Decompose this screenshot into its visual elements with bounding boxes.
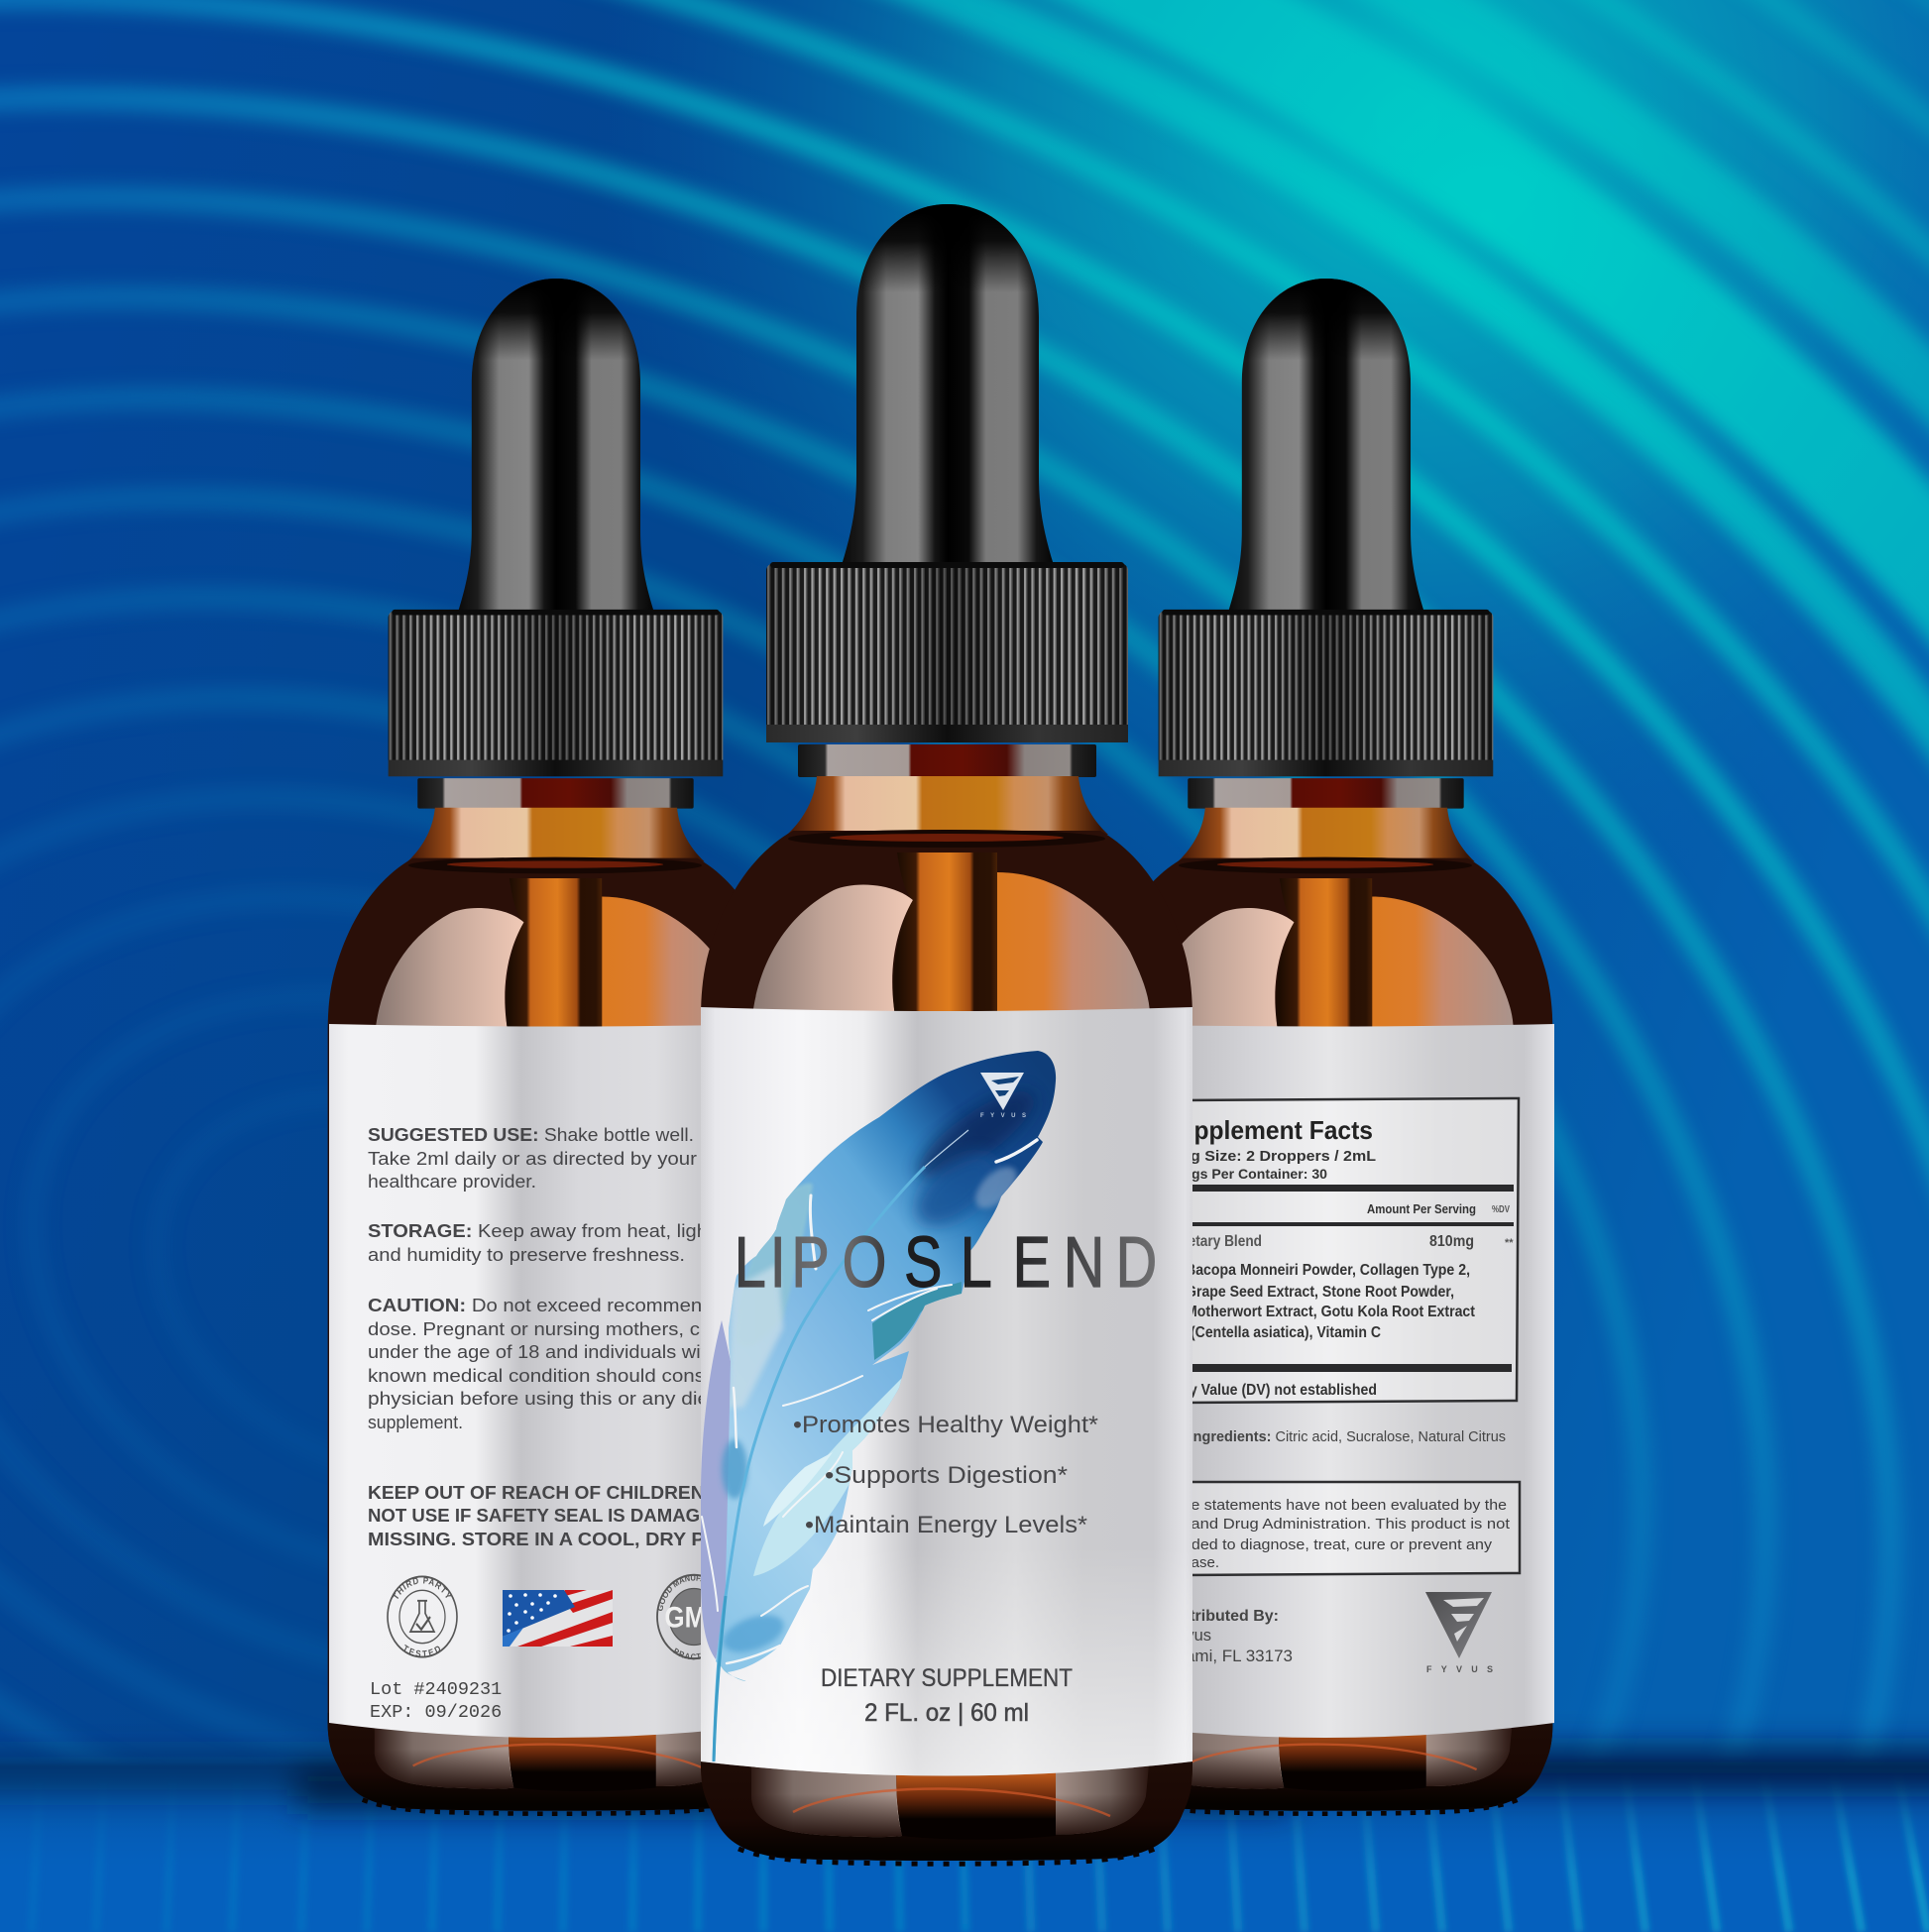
bottle body and dropper bbox=[701, 204, 1192, 1864]
benefit list bbox=[793, 1412, 1098, 1538]
feather brand logo bbox=[980, 1073, 1026, 1119]
teal upper barb bbox=[736, 1184, 813, 1346]
white slits bbox=[702, 1140, 1037, 1663]
label panel bbox=[1096, 1024, 1554, 1738]
supplement facts box: ** Daily Value (DV) not established bbox=[1149, 1382, 1377, 1399]
bottle body and dropper bbox=[328, 279, 782, 1814]
feather brand logo: FYVUS bbox=[980, 1113, 1026, 1119]
third party tested seal: TESTED bbox=[404, 1644, 440, 1656]
dark ink patch bbox=[909, 1088, 1037, 1186]
right bottle: supplement facts bbox=[1096, 279, 1554, 1814]
supplement facts box: ** bbox=[1505, 1237, 1514, 1249]
directions text: dose. Pregnant or nursing mothers, children bbox=[368, 1319, 760, 1339]
directions text: STORAGE: Keep away from heat, light, bbox=[368, 1221, 719, 1241]
directions text: KEEP OUT OF REACH OF CHILDREN. DO bbox=[368, 1483, 743, 1503]
directions text: known medical condition should consult a bbox=[368, 1366, 744, 1386]
supplement facts box: %DV bbox=[1492, 1204, 1510, 1215]
fda disclaimer box: disease. bbox=[1164, 1554, 1219, 1571]
lot number bbox=[370, 1679, 502, 1723]
floor shadow band bbox=[0, 1749, 1929, 1809]
lot number: EXP: 09/2026 bbox=[370, 1702, 502, 1723]
tail barbs bbox=[721, 1663, 745, 1681]
directions text: under the age of 18 and individuals with a bbox=[368, 1342, 735, 1362]
distributor details: Distributed By: bbox=[1165, 1608, 1279, 1625]
directions text: physician before using this or any dietary bbox=[368, 1389, 743, 1409]
pale lower vane bbox=[753, 1373, 907, 1576]
benefit list: •Supports Digestion* bbox=[825, 1462, 1068, 1489]
distributor details: Miami, FL 33173 bbox=[1168, 1647, 1293, 1665]
other ingredients: Other ingredients: Citric acid, Sucralose, Natural Citrus bbox=[1147, 1429, 1506, 1445]
supplement facts box: Bacopa Monneiri Powder, Collagen Type 2, bbox=[1186, 1262, 1470, 1279]
supplement facts box: Servings Per Container: 30 bbox=[1149, 1166, 1327, 1182]
feather spine bbox=[714, 1167, 925, 1762]
product type and size: 2 FL. oz | 60 ml bbox=[864, 1699, 1029, 1727]
fyvus logo: FYVUS bbox=[1426, 1664, 1493, 1674]
pale left vane bbox=[729, 1264, 783, 1408]
fda disclaimer box: Food and Drug Administration. This product is not bbox=[1149, 1516, 1511, 1533]
fda disclaimer box bbox=[1149, 1482, 1520, 1575]
product type and size: DIETARY SUPPLEMENT bbox=[821, 1664, 1073, 1692]
gmp seal: GOOD MANUFACTURING bbox=[656, 1573, 732, 1612]
fyvus logo bbox=[1425, 1592, 1493, 1674]
directions text: healthcare provider. bbox=[368, 1172, 536, 1192]
supplement facts box: (Centella asiatica), Vitamin C bbox=[1191, 1324, 1381, 1341]
directions text: Take 2ml daily or as directed by your bbox=[368, 1149, 697, 1169]
watercolor feather bbox=[694, 1041, 1071, 1762]
directions text: CAUTION: Do not exceed recommended bbox=[368, 1296, 736, 1315]
lot number: Lot #2409231 bbox=[370, 1679, 502, 1700]
fda disclaimer box: intended to diagnose, treat, cure or prevent any bbox=[1157, 1536, 1493, 1553]
supplement facts box: Grape Seed Extract, Stone Root Powder, bbox=[1186, 1284, 1454, 1301]
gmp seal: GMP bbox=[664, 1601, 724, 1634]
directions text: MISSING. STORE IN A COOL, DRY PLACE. bbox=[368, 1530, 763, 1549]
centre bottle: front label bbox=[694, 204, 1192, 1864]
gmp seal: PRACTICE bbox=[672, 1646, 717, 1661]
light lower patch bbox=[718, 1608, 789, 1659]
directions text: and humidity to preserve freshness. bbox=[368, 1245, 685, 1265]
label panel bbox=[329, 1024, 781, 1738]
fda disclaimer box: These statements have not been evaluated by the bbox=[1156, 1497, 1507, 1514]
usa flag bbox=[503, 1590, 613, 1647]
supplement facts box: Serving Size: 2 Droppers / 2mL bbox=[1142, 1148, 1376, 1165]
teal lower barb bbox=[872, 1282, 962, 1360]
supplement facts box: 810mg bbox=[1429, 1233, 1474, 1250]
third party tested seal: THIRD PARTY bbox=[393, 1577, 452, 1599]
label panel bbox=[701, 1007, 1192, 1776]
bottle body and dropper bbox=[1098, 279, 1552, 1814]
directions text: SUGGESTED USE: Shake bottle well. bbox=[368, 1125, 694, 1145]
directions text: NOT USE IF SAFETY SEAL IS DAMAGED OR bbox=[368, 1506, 758, 1526]
supplement facts box: Dietary Blend bbox=[1175, 1233, 1262, 1250]
third party tested seal bbox=[388, 1575, 457, 1659]
gmp seal bbox=[656, 1573, 732, 1661]
supplement facts box bbox=[1142, 1098, 1519, 1403]
floor with reflected stripes bbox=[0, 1755, 1929, 1932]
benefit list: •Maintain Energy Levels* bbox=[805, 1512, 1087, 1538]
directions text: supplement. bbox=[368, 1413, 463, 1432]
supplement facts box: Motherwort Extract, Gotu Kola Root Extract bbox=[1186, 1304, 1476, 1320]
benefit list: •Promotes Healthy Weight* bbox=[793, 1412, 1098, 1438]
flavor line: Flavor. bbox=[1150, 1447, 1191, 1463]
lavender lobe bbox=[701, 1320, 731, 1659]
supplement facts box: Supplement Facts bbox=[1163, 1115, 1373, 1145]
distributor details bbox=[1165, 1608, 1293, 1665]
supplement facts box: Amount Per Serving bbox=[1367, 1202, 1476, 1216]
vane with ink washes bbox=[716, 1051, 1057, 1672]
left bottle: usage directions bbox=[328, 279, 782, 1814]
directions text bbox=[368, 1125, 763, 1549]
product name: LIPOSLEND bbox=[735, 1222, 1157, 1302]
product type and size bbox=[821, 1664, 1073, 1727]
distributor details: Fyvus bbox=[1168, 1627, 1211, 1645]
